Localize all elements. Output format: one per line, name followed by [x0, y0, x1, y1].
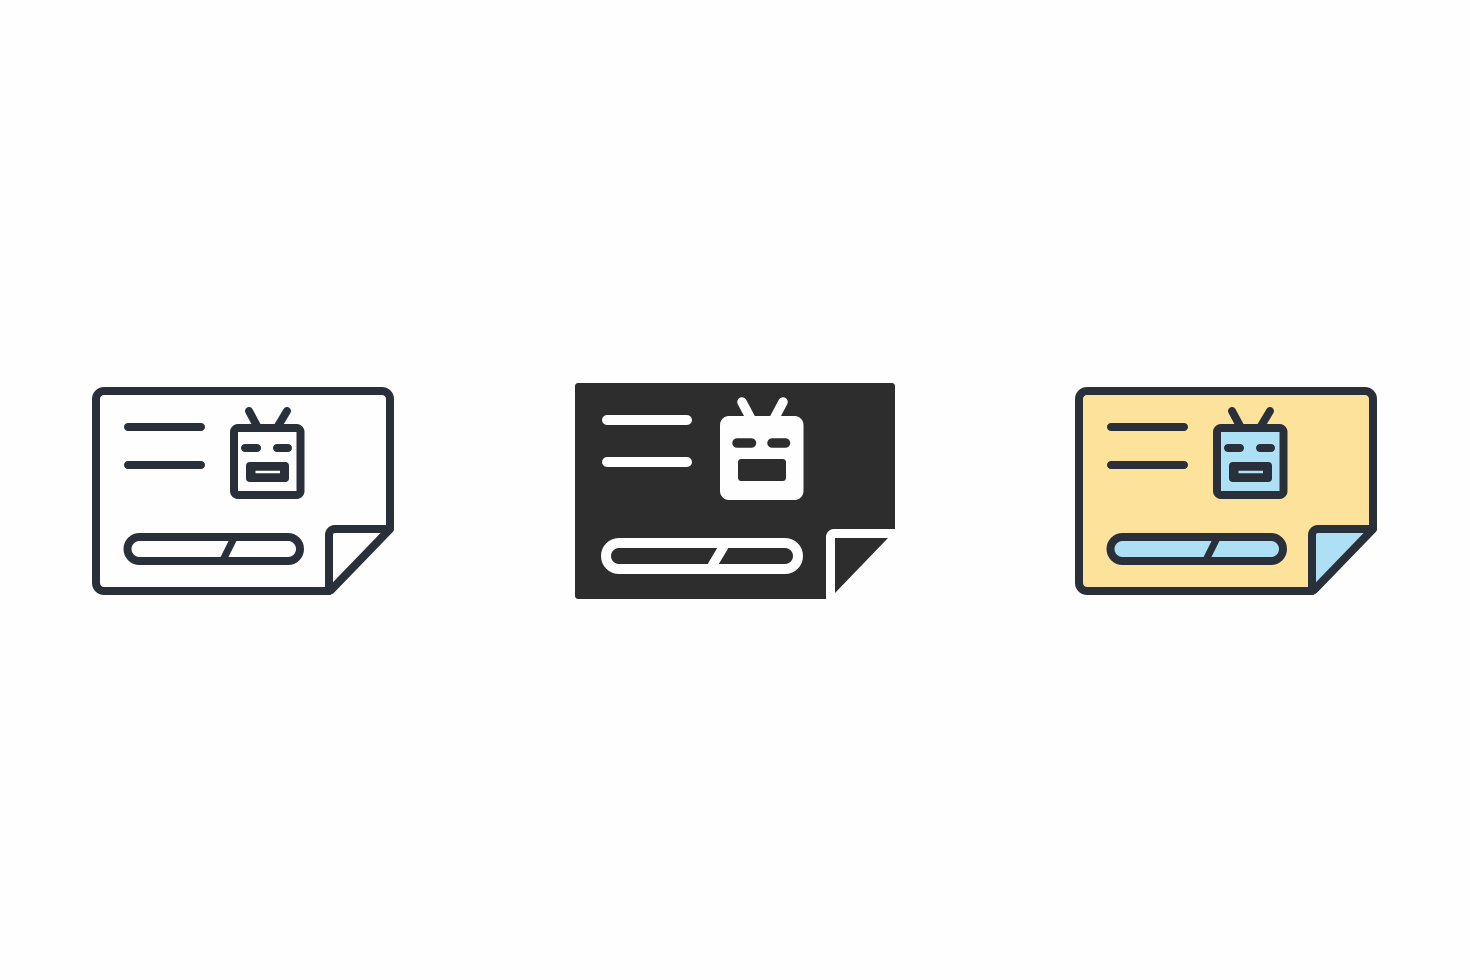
icon: outline robot card: [96, 391, 390, 591]
robot mouth: [738, 459, 786, 481]
card sheet outline: [96, 391, 390, 591]
robot head: [234, 428, 300, 495]
yellow card sheet: [1079, 391, 1373, 591]
white robot antennae: [742, 402, 783, 419]
icon: coloured robot card: [1079, 391, 1373, 591]
robot eyes: [245, 444, 288, 452]
robot mouth: [246, 462, 289, 482]
text lines: [128, 427, 201, 465]
blue folded corner: [1312, 529, 1373, 591]
white text lines: [607, 420, 687, 462]
progress bar: [128, 537, 300, 561]
folded corner: [329, 529, 390, 591]
blue robot head: [1217, 428, 1284, 495]
white robot head: [720, 416, 804, 500]
solid card sheet: [575, 383, 895, 599]
progress bar: [606, 543, 798, 569]
robot antennae: [249, 411, 287, 426]
icon: solid robot card: [575, 383, 895, 599]
robot antennae: [1232, 411, 1270, 426]
text lines: [1111, 427, 1184, 465]
robot eyes: [1228, 444, 1271, 452]
blue progress bar: [1110, 537, 1283, 561]
solid folded corner: [835, 538, 888, 593]
robot eyes: [737, 438, 786, 448]
robot mouth: [1229, 462, 1272, 482]
